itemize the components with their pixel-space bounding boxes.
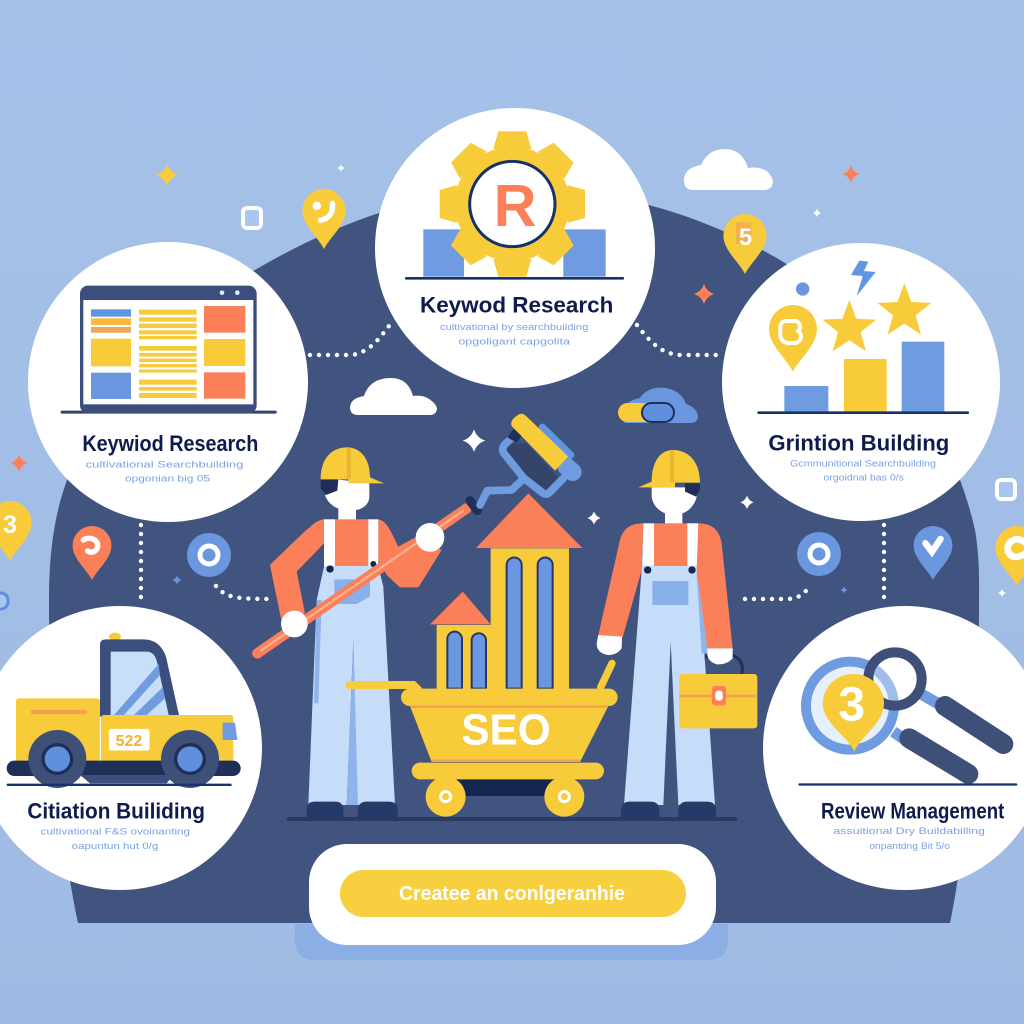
icon: lightning bolt [851, 261, 876, 296]
arms [598, 523, 733, 648]
panel: citation building left with truck [0, 606, 262, 890]
pocket [334, 579, 370, 604]
button label: Createe an conlgeranhie [399, 883, 625, 905]
icon: yellow map pin far left: 3 [3, 511, 17, 539]
cart handle [349, 685, 418, 690]
body text: oapuntun hut 0/g [72, 841, 158, 851]
icon: yellow map pin far right [995, 526, 1024, 586]
legs and bib [308, 519, 395, 805]
icon: blue map pin [914, 526, 952, 580]
sparkles [463, 429, 754, 525]
icon: yellow map pin far left [0, 501, 32, 561]
heading: Citiation Builiding [27, 798, 205, 823]
head and neck [652, 487, 697, 523]
yellow pill [340, 870, 686, 917]
dotted connector: left [141, 525, 274, 602]
roller [511, 414, 573, 472]
icon: yellow map pin top right [723, 214, 767, 274]
icon: orange sparkle right [842, 166, 860, 182]
hat [321, 447, 384, 483]
body text: opgoligant capgolita [458, 336, 570, 346]
dotted connector: right [745, 525, 884, 602]
icon: square badge right [997, 480, 1015, 499]
icon: laptop [61, 286, 277, 414]
body text [440, 322, 588, 346]
icon: gear: R [494, 172, 536, 239]
head and neck [325, 479, 369, 519]
legs and bib [624, 523, 715, 805]
body text: opgonian big 05 [125, 473, 210, 483]
icon: yellow map pin top right: 5 [739, 224, 752, 251]
toolbox handle [699, 653, 742, 674]
cart base [457, 777, 555, 796]
icon: blue cloud with pill [618, 388, 698, 423]
roller pole [257, 508, 467, 653]
icon: orange map pin [73, 526, 111, 580]
hat [638, 450, 700, 487]
icon: truck: 522 [116, 733, 142, 750]
dotted connector: top right [637, 325, 722, 355]
worker right [597, 450, 757, 817]
body text: Gcmmunitional Searchbuilding [790, 459, 936, 469]
icon: target ring right [797, 532, 841, 576]
arm up left [270, 519, 324, 622]
baseline [7, 784, 232, 786]
ground line [287, 817, 737, 821]
toolbox [679, 674, 757, 728]
icon: white sparkle top left [337, 164, 345, 172]
button shadow [295, 924, 728, 960]
SEO label: SEO [461, 706, 551, 754]
icon: orange sparkle middle [694, 284, 714, 304]
central illustration [257, 414, 757, 821]
torso [335, 519, 368, 566]
hands [281, 611, 308, 637]
icon: truck [7, 633, 241, 788]
SEO cart [349, 663, 618, 817]
icon: blue ring edge [0, 593, 8, 609]
white card [309, 844, 716, 945]
panel: left keyword research [28, 242, 308, 522]
panel: citation building right [722, 243, 1000, 521]
buttons [326, 565, 334, 573]
icon: magnifiers and pin: 3 [838, 678, 865, 732]
icon: square badge left [243, 208, 261, 228]
panel: review management [763, 606, 1024, 890]
call to action [295, 844, 728, 960]
baseline [757, 411, 969, 414]
chart bars behind gear [423, 229, 606, 277]
icon: target ring left [187, 533, 231, 577]
hands [597, 635, 733, 664]
icon: blue sparkle right [840, 586, 848, 594]
body text: cultivational F&S ovoinanting [41, 827, 190, 837]
worker left [257, 414, 573, 817]
heading: Keywod Research [420, 293, 613, 318]
torso [654, 523, 687, 566]
body text: assuitional Dry Buildabilling [833, 826, 985, 836]
baseline [405, 277, 624, 280]
icon: white sparkle lower right [998, 589, 1006, 597]
icon: white sparkle top right [813, 209, 821, 217]
body text [833, 826, 985, 851]
body text: cultivational by searchbuilding [440, 322, 588, 332]
heading: Keywiod Research [82, 431, 258, 456]
icon: blue sparkle left [172, 576, 182, 584]
body text: onpantdng Bit 5/o [869, 841, 950, 851]
shoes [621, 802, 716, 817]
navy dome backdrop [49, 188, 979, 923]
icon: blue dot [796, 282, 809, 296]
icon: yellow map pin top left [302, 189, 346, 249]
pocket [652, 581, 688, 605]
bar chart [784, 342, 944, 412]
roller frame [480, 435, 563, 505]
icon: yellow sparkle [156, 164, 178, 186]
icon: magnifiers and pin [806, 652, 1003, 774]
building [430, 493, 582, 690]
panel: top keyword research [375, 108, 655, 388]
cart tub [410, 706, 608, 762]
body text [41, 827, 190, 851]
shoes [307, 802, 398, 817]
roller dark interior [504, 443, 558, 491]
body text: orgoidnal bas 0/s [823, 473, 905, 483]
wheels [426, 777, 466, 817]
icon: cloud centre left [350, 378, 437, 415]
baseline [798, 783, 1017, 786]
icon: gear [440, 131, 585, 277]
icon: cloud top right [684, 149, 773, 190]
dotted connector: top left [310, 322, 392, 355]
hair [321, 479, 338, 495]
roller collar [507, 429, 523, 443]
decorative sparkles and badges [0, 164, 1015, 609]
buttons [644, 566, 651, 574]
body text [790, 459, 936, 483]
heading: Grintion Building [768, 431, 949, 456]
icon: yellow pin with letter [769, 305, 817, 372]
body text: cultivational Searchbuilding [86, 459, 243, 469]
body text [86, 459, 243, 483]
hair [685, 483, 700, 497]
icon: stars [822, 283, 931, 351]
icon: orange sparkle left [10, 454, 28, 472]
arm right [378, 519, 442, 587]
